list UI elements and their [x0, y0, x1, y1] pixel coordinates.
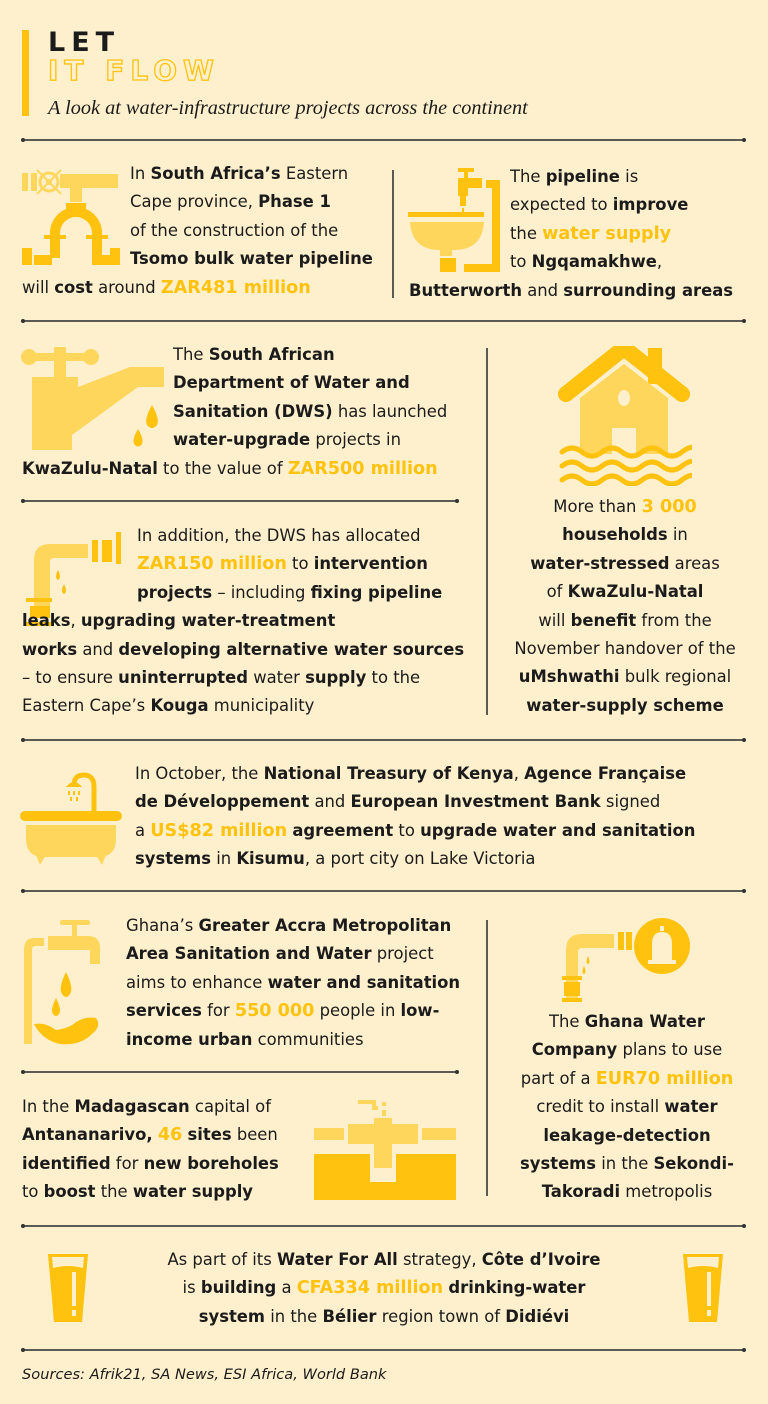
icon: glass left — [48, 1254, 88, 1322]
text: Greater Accra: services for 550 000 people in low- — [126, 1001, 439, 1021]
text: 3000 households — [514, 497, 736, 715]
text: Greater Accra: income urban communities — [126, 1030, 364, 1049]
text: DWS KwaZulu-Natal — [22, 345, 447, 479]
text: Greater Accra: Ghana’s Greater Accra Metropolitan — [126, 916, 451, 935]
text: DWS KwaZulu-Natal: The South African — [173, 345, 335, 364]
text: DWS KwaZulu-Natal: Sanitation (DWS) has launched — [173, 402, 447, 421]
text: pipeline improve: to Ngqamakhwe, — [510, 252, 662, 271]
text: DWS Kouga: ZAR150 million to intervention — [137, 554, 428, 574]
text: Kisumu: de Développement and European Investment Bank signed — [135, 792, 660, 811]
icon: bathtub — [20, 772, 122, 865]
text: Ghana Water Company: leakage-detection — [543, 1126, 711, 1145]
text: pipeline improve: the water supply — [510, 224, 671, 244]
text: 3000 households: water-stressed areas — [530, 554, 720, 573]
text: Ghana Water Company — [520, 1012, 734, 1201]
title block — [22, 27, 528, 119]
text: DWS Kouga: – to ensure uninterrupted water supply to the — [22, 668, 420, 687]
icon: glass right — [683, 1254, 723, 1322]
text: Tsomo pipeline: In South Africa’s Eastern — [130, 164, 348, 183]
text: Antananarivo — [22, 1097, 279, 1201]
text: Ghana Water Company: credit to install water — [536, 1097, 718, 1116]
text: 3000 households: households in — [562, 525, 688, 544]
title line 1: LET — [48, 27, 120, 58]
sources: Sources: Afrik21, SA News, ESI Africa, World Bank — [22, 1366, 386, 1383]
text: Ghana Water Company: Takoradi metropolis — [542, 1182, 712, 1201]
text: 3000 households: November handover of the — [514, 639, 736, 658]
text: Greater Accra — [126, 916, 460, 1049]
text: DWS KwaZulu-Natal: Department of Water and — [173, 373, 410, 392]
text: Ghana Water Company: systems in the Sekondi- — [520, 1154, 734, 1173]
text: Antananarivo: to boost the water supply — [22, 1182, 253, 1201]
subtitle: A look at water-infrastructure projects across the continent — [48, 97, 528, 119]
text: pipeline improve: expected to improve — [510, 195, 688, 214]
text: Tsomo pipeline: Tsomo bulk water pipeline — [130, 249, 373, 268]
accent bar — [22, 30, 29, 116]
text: Tsomo pipeline: will cost around ZAR481 million — [22, 278, 311, 298]
text: Cote d'Ivoire: system in the Bélier region town of Didiévi — [199, 1307, 569, 1326]
icon: pipe with alarm — [562, 918, 690, 1002]
icon: house with waves — [558, 346, 692, 486]
icon: borehole — [314, 1100, 456, 1200]
text: DWS Kouga: works and developing alternative water sources — [22, 640, 464, 659]
icon: sink — [408, 168, 500, 272]
text: 3000 households: of KwaZulu-Natal — [547, 582, 703, 601]
text: 3000 households: uMshwathi bulk regional — [519, 667, 731, 686]
text: Antananarivo: identified for new boreholes — [22, 1154, 279, 1173]
text: Ghana Water Company: The Ghana Water — [549, 1012, 705, 1031]
text: 3000 households: will benefit from the — [538, 611, 712, 630]
text: pipeline improve: The pipeline is — [510, 167, 638, 186]
text: Greater Accra: aims to enhance water and sanitation — [126, 973, 460, 992]
text: Kisumu: In October, the National Treasury of Kenya, Agence Française — [135, 764, 686, 783]
text: Tsomo pipeline: of the construction of the — [130, 221, 338, 240]
text: Cote d'Ivoire: is building a CFA334 million drinking-water — [183, 1278, 585, 1298]
text: DWS KwaZulu-Natal: water-upgrade projects in — [173, 430, 401, 449]
text: Kisumu — [135, 764, 695, 868]
text: DWS KwaZulu-Natal: KwaZulu-Natal to the value of ZAR500 million — [22, 459, 438, 479]
text: 3000 households: More than 3 000 — [553, 497, 697, 517]
text: Ghana Water Company: Company plans to use — [532, 1040, 722, 1059]
text: DWS Kouga: leaks, upgrading water-treatment — [22, 611, 335, 630]
text: Antananarivo: Antananarivo, 46 sites been — [22, 1125, 278, 1145]
text: pipeline improve: Butterworth and surrounding areas — [409, 281, 733, 300]
text: DWS Kouga: In addition, the DWS has allocated — [137, 526, 421, 545]
text: Tsomo pipeline — [22, 164, 373, 298]
text: Kisumu: a US$82 million agreement to upgrade water and sanitation — [135, 821, 695, 841]
text: Antananarivo: In the Madagascan capital of — [22, 1097, 271, 1116]
text: Cote d'Ivoire — [167, 1250, 601, 1326]
text: Tsomo pipeline: Cape province, Phase 1 — [130, 192, 331, 211]
text: Cote d'Ivoire: As part of its Water For All strategy, Côte d’Ivoire — [167, 1250, 601, 1269]
icon: tap with hand — [24, 920, 100, 1044]
text: 3000 households: water-supply scheme — [526, 696, 724, 715]
text: DWS Kouga: projects – including fixing pipeline — [137, 583, 442, 602]
text: Kisumu: systems in Kisumu, a port city on Lake Victoria — [135, 849, 535, 868]
icon: pipe with valve — [22, 169, 120, 265]
text: DWS Kouga: Eastern Cape’s Kouga municipality — [22, 696, 314, 715]
text: Ghana Water Company: part of a EUR70 million — [521, 1069, 733, 1089]
text: pipeline improve — [409, 167, 733, 300]
text: DWS Kouga — [22, 526, 464, 715]
icon: leaking pipe — [26, 532, 121, 626]
icon: tap with drops — [21, 347, 164, 450]
text: Greater Accra: Area Sanitation and Water project — [126, 944, 434, 963]
